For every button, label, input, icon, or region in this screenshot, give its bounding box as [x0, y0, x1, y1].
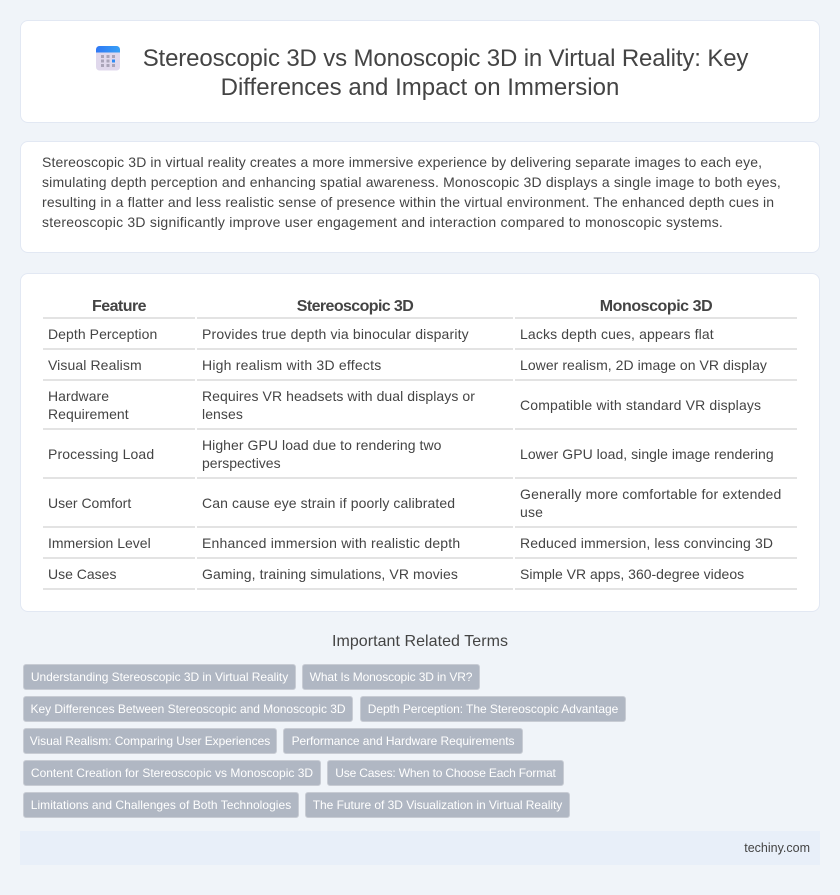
related terms tags — [23, 664, 626, 818]
row: depth perception: Lacks depth cues, appears flat — [520, 326, 714, 342]
row: processing load: perspectives — [202, 455, 281, 471]
table header: Stereoscopic 3D — [297, 298, 413, 315]
row: visual realism — [48, 357, 767, 373]
tag: Content Creation for Stereoscopic vs Monoscopic 3D — [31, 766, 313, 780]
row: use cases: Simple VR apps, 360-degree videos — [520, 566, 744, 582]
title — [143, 45, 748, 101]
tag: Visual Realism: Comparing User Experiences — [30, 734, 270, 748]
tag: The Future of 3D Visualization in Virtual Reality — [313, 798, 562, 812]
related terms heading: Important Related Terms — [332, 633, 508, 650]
tag: Use Cases: When to Choose Each Format — [335, 766, 556, 780]
icon: calendar grid — [96, 46, 120, 70]
row: hardware requirement: Requirement — [48, 406, 129, 422]
tag — [360, 696, 626, 722]
tag — [302, 664, 480, 690]
row: depth perception: Depth Perception — [48, 326, 157, 342]
row: depth perception — [48, 326, 714, 342]
table header — [92, 298, 712, 315]
row: visual realism: Lower realism, 2D image on VR display — [520, 357, 767, 373]
tag — [23, 728, 277, 754]
tag — [327, 760, 564, 786]
row: hardware requirement — [48, 388, 761, 422]
tag — [23, 696, 353, 722]
row: depth perception: Provides true depth via binocular disparity — [202, 326, 469, 342]
header card — [20, 20, 820, 123]
row: processing load: Processing Load — [48, 446, 154, 462]
title: Stereoscopic 3D vs Monoscopic 3D in Virtual Reality: Key — [143, 45, 748, 72]
comparison table — [43, 298, 797, 590]
footer text: techiny.com — [744, 841, 810, 855]
tag: What Is Monoscopic 3D in VR? — [310, 670, 472, 684]
row: immersion level: Enhanced immersion with realistic depth — [202, 535, 460, 551]
row: processing load: Lower GPU load, single image rendering — [520, 446, 774, 462]
tag — [23, 664, 296, 690]
tag: Key Differences Between Stereoscopic and Monoscopic 3D — [30, 702, 346, 716]
tag: Performance and Hardware Requirements — [292, 734, 514, 748]
row: user comfort: Generally more comfortable for extended — [520, 486, 781, 502]
intro text: Stereoscopic 3D in virtual reality creates a more immersive experience by delivering separate images to each eye, — [42, 154, 762, 170]
intro text: simulating depth perception and enhancing spatial awareness. Monoscopic 3D displays a single image to both eyes, — [42, 174, 781, 190]
intro card — [20, 141, 820, 253]
row: visual realism: Visual Realism — [48, 357, 142, 373]
intro text: resulting in a flatter and less realistic sense of presence within the virtual environment. The enhanced depth cues in — [42, 194, 774, 210]
row: visual realism: High realism with 3D effects — [202, 357, 381, 373]
table header: Feature — [92, 298, 146, 315]
intro text: stereoscopic 3D significantly improve user engagement and interaction compared to monoscopic systems. — [42, 214, 723, 230]
row: hardware requirement: Compatible with standard VR displays — [520, 397, 761, 413]
intro text — [42, 154, 781, 230]
row: user comfort: Can cause eye strain if poorly calibrated — [202, 495, 455, 511]
table header: Monoscopic 3D — [600, 298, 712, 315]
row: processing load — [48, 437, 774, 471]
tag: Depth Perception: The Stereoscopic Advantage — [368, 702, 618, 716]
tag — [23, 792, 299, 818]
row: use cases: Gaming, training simulations, VR movies — [202, 566, 458, 582]
row: use cases — [48, 566, 744, 582]
footer bar — [20, 831, 820, 865]
row: hardware requirement: lenses — [202, 406, 243, 422]
tag — [23, 760, 321, 786]
row: immersion level: Immersion Level — [48, 535, 151, 551]
row: immersion level — [48, 535, 773, 551]
row: immersion level: Reduced immersion, less convincing 3D — [520, 535, 773, 551]
row: processing load: Higher GPU load due to rendering two — [202, 437, 442, 453]
row: user comfort — [48, 486, 781, 520]
tag: Limitations and Challenges of Both Technologies — [31, 798, 291, 812]
row: use cases: Use Cases — [48, 566, 116, 582]
row: user comfort: use — [520, 504, 543, 520]
row: hardware requirement: Hardware — [48, 388, 109, 404]
comparison table card — [20, 273, 820, 612]
tag — [305, 792, 570, 818]
title: Differences and Impact on Immersion — [221, 74, 619, 101]
tag: Understanding Stereoscopic 3D in Virtual Reality — [31, 670, 288, 684]
tag — [283, 728, 523, 754]
row: hardware requirement: Requires VR headsets with dual displays or — [202, 388, 475, 404]
row: user comfort: User Comfort — [48, 495, 131, 511]
